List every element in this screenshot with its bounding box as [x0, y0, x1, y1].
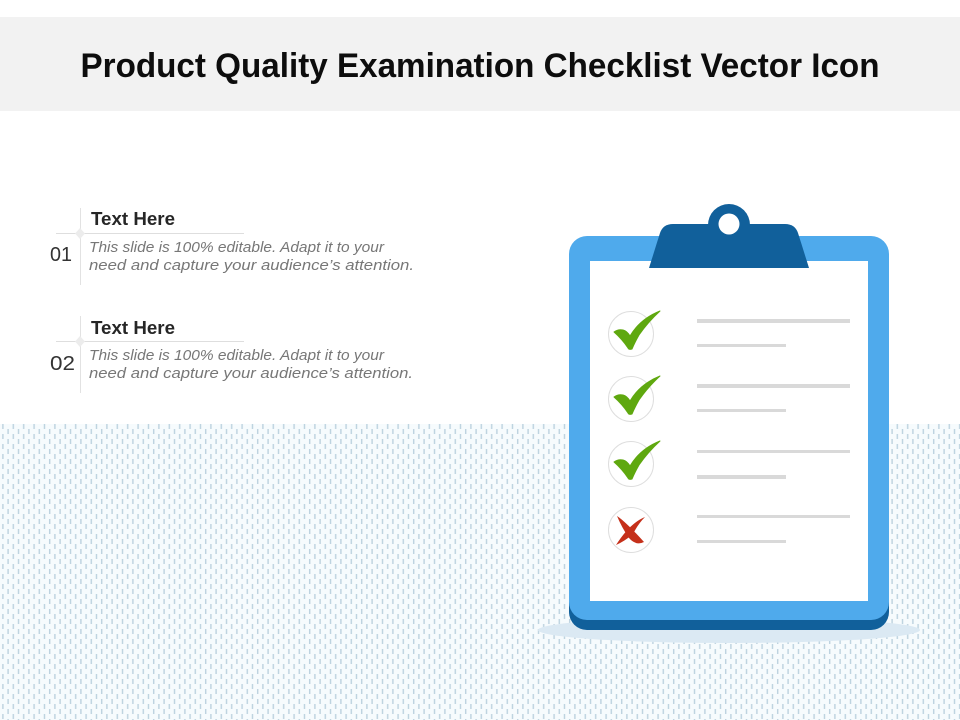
text block 02: This slide is 100% editable. Adapt it to your: [89, 347, 385, 364]
background dotted pattern: [0, 424, 960, 720]
item lines: [697, 319, 850, 543]
text block 01: [50, 208, 414, 285]
paper: [590, 261, 868, 601]
text block 02: Text Here: [91, 318, 175, 338]
title: Product Quality Examination Checklist Vector Icon: [80, 47, 880, 85]
title banner: [0, 17, 960, 111]
clip: [649, 204, 809, 268]
text block 01: need and capture your audience’s attention.: [89, 257, 414, 274]
item 3: check: [608, 441, 660, 486]
text block 01: 01: [50, 244, 72, 266]
text block 02: need and capture your audience’s attention.: [89, 365, 413, 382]
item 1: check: [608, 311, 660, 356]
text block 01: Text Here: [91, 209, 175, 229]
item 4: cross: [608, 508, 654, 552]
shadow: [538, 617, 920, 643]
text block 01: This slide is 100% editable. Adapt it to your: [89, 239, 385, 256]
board: [569, 236, 889, 620]
text block 02: [50, 316, 413, 393]
text block 02: 02: [50, 353, 75, 375]
item 2: check: [608, 376, 660, 422]
clipboard illustration: [538, 204, 920, 643]
board edge: [569, 250, 889, 630]
